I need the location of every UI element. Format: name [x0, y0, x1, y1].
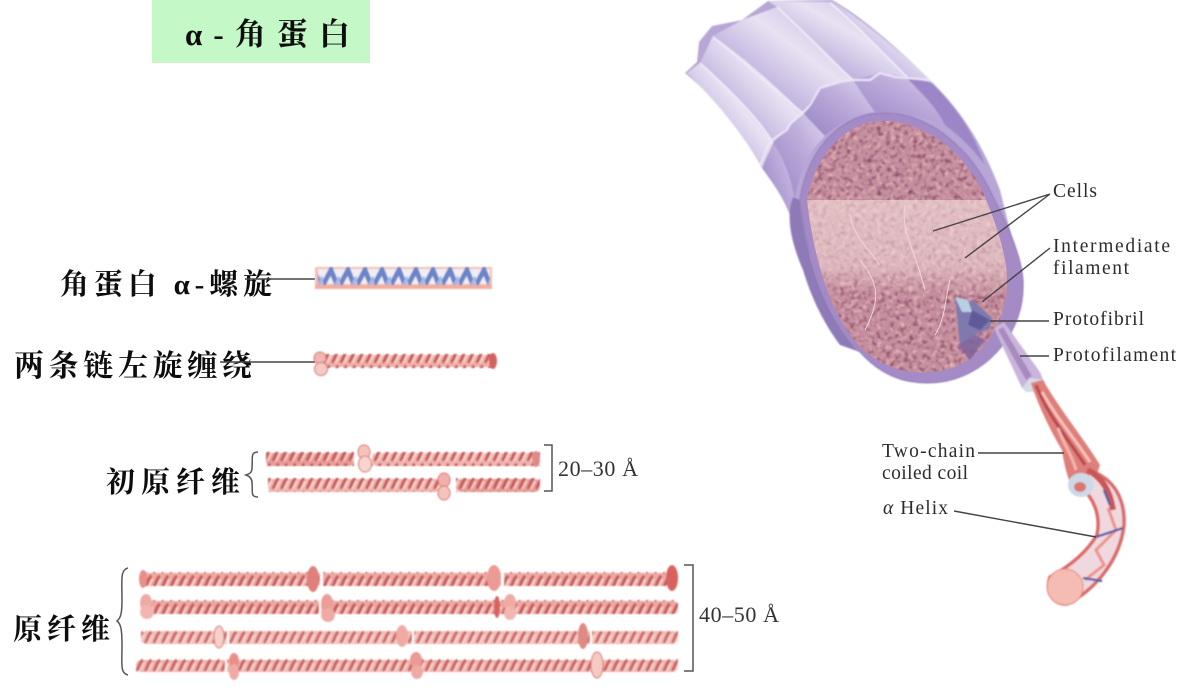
fibre lower plates: [762, 128, 793, 215]
leader: protofilament: [1020, 355, 1049, 357]
label: keratin alpha helix: 角蛋白 α-螺旋: [60, 268, 272, 301]
upper coil: [1031, 380, 1100, 495]
fibre outer shaft: [685, 0, 1023, 352]
label: intermediate filament: Intermediate: [1053, 236, 1170, 257]
cut end lower: [1047, 569, 1083, 605]
strands: protofilament: [266, 445, 540, 500]
label: two chains left-handed coil: 两条链左旋缠绕: [14, 350, 252, 383]
protofilament tail: [994, 322, 1044, 392]
strand: alpha helix: [315, 267, 492, 289]
lower tube: [1048, 470, 1124, 604]
title: [152, 0, 370, 63]
fibre plate 3: [713, 7, 853, 113]
coiled coil: [1031, 380, 1124, 605]
leader: two-chain coiled coil: [978, 452, 1064, 454]
leader: alpha helix: [954, 511, 1096, 537]
fibre plate 5: [832, 1, 933, 83]
leader: intermediate filament: [982, 248, 1050, 302]
label: cells: Cells: [1053, 181, 1097, 202]
exposed protofibril bundle: [955, 297, 992, 360]
label: intermediate filament: [1053, 236, 1170, 279]
plate ridges: [700, 3, 907, 143]
dimension: 20-30 angstrom: 20–30 Å: [558, 456, 638, 481]
cross-section rim: [800, 113, 1023, 383]
row 4: [136, 652, 678, 680]
bracket: protofibril left: [117, 568, 128, 675]
label: protofilament: 初原纤维: [106, 466, 240, 499]
row 2: [140, 594, 678, 622]
fibre plate 4: [768, 1, 907, 80]
label: protofibril: 原纤维: [13, 613, 110, 646]
leader: protofibril: [990, 320, 1049, 322]
light band: [807, 200, 1007, 291]
cut end upper: [1068, 473, 1094, 497]
row 3: [141, 623, 678, 649]
label: two-chain coiled coil: coiled coil: [882, 463, 969, 484]
bracket: 20-30 angstrom: [544, 445, 552, 491]
illustration: hair fibre: [685, 0, 1124, 605]
title: α-角蛋白: [185, 17, 350, 52]
label: intermediate filament: filament: [1053, 258, 1130, 279]
label: protofilament: Protofilament: [1053, 345, 1177, 366]
bracket: 40-50 angstrom: [684, 565, 693, 671]
left outer strip: [790, 197, 860, 352]
leader: cells: [933, 194, 1050, 258]
row 1: [139, 565, 678, 592]
label: alpha helix: α Helix: [883, 498, 948, 519]
strand: two-chain coil: [314, 352, 497, 376]
fibre plate 1: [687, 63, 773, 168]
bracket: protofilament left: [246, 452, 258, 497]
label: two-chain coiled coil: Two-chain: [882, 441, 975, 462]
label: two-chain coiled coil: [882, 441, 975, 484]
seam line: [760, 73, 930, 167]
label: protofibril: Protofibril: [1053, 309, 1145, 330]
cross-section core: [807, 120, 1007, 372]
fibre plate 2: [700, 36, 803, 143]
dimension: 40-50 angstrom: 40–50 Å: [699, 602, 779, 627]
strands: protofibril: [136, 565, 678, 680]
